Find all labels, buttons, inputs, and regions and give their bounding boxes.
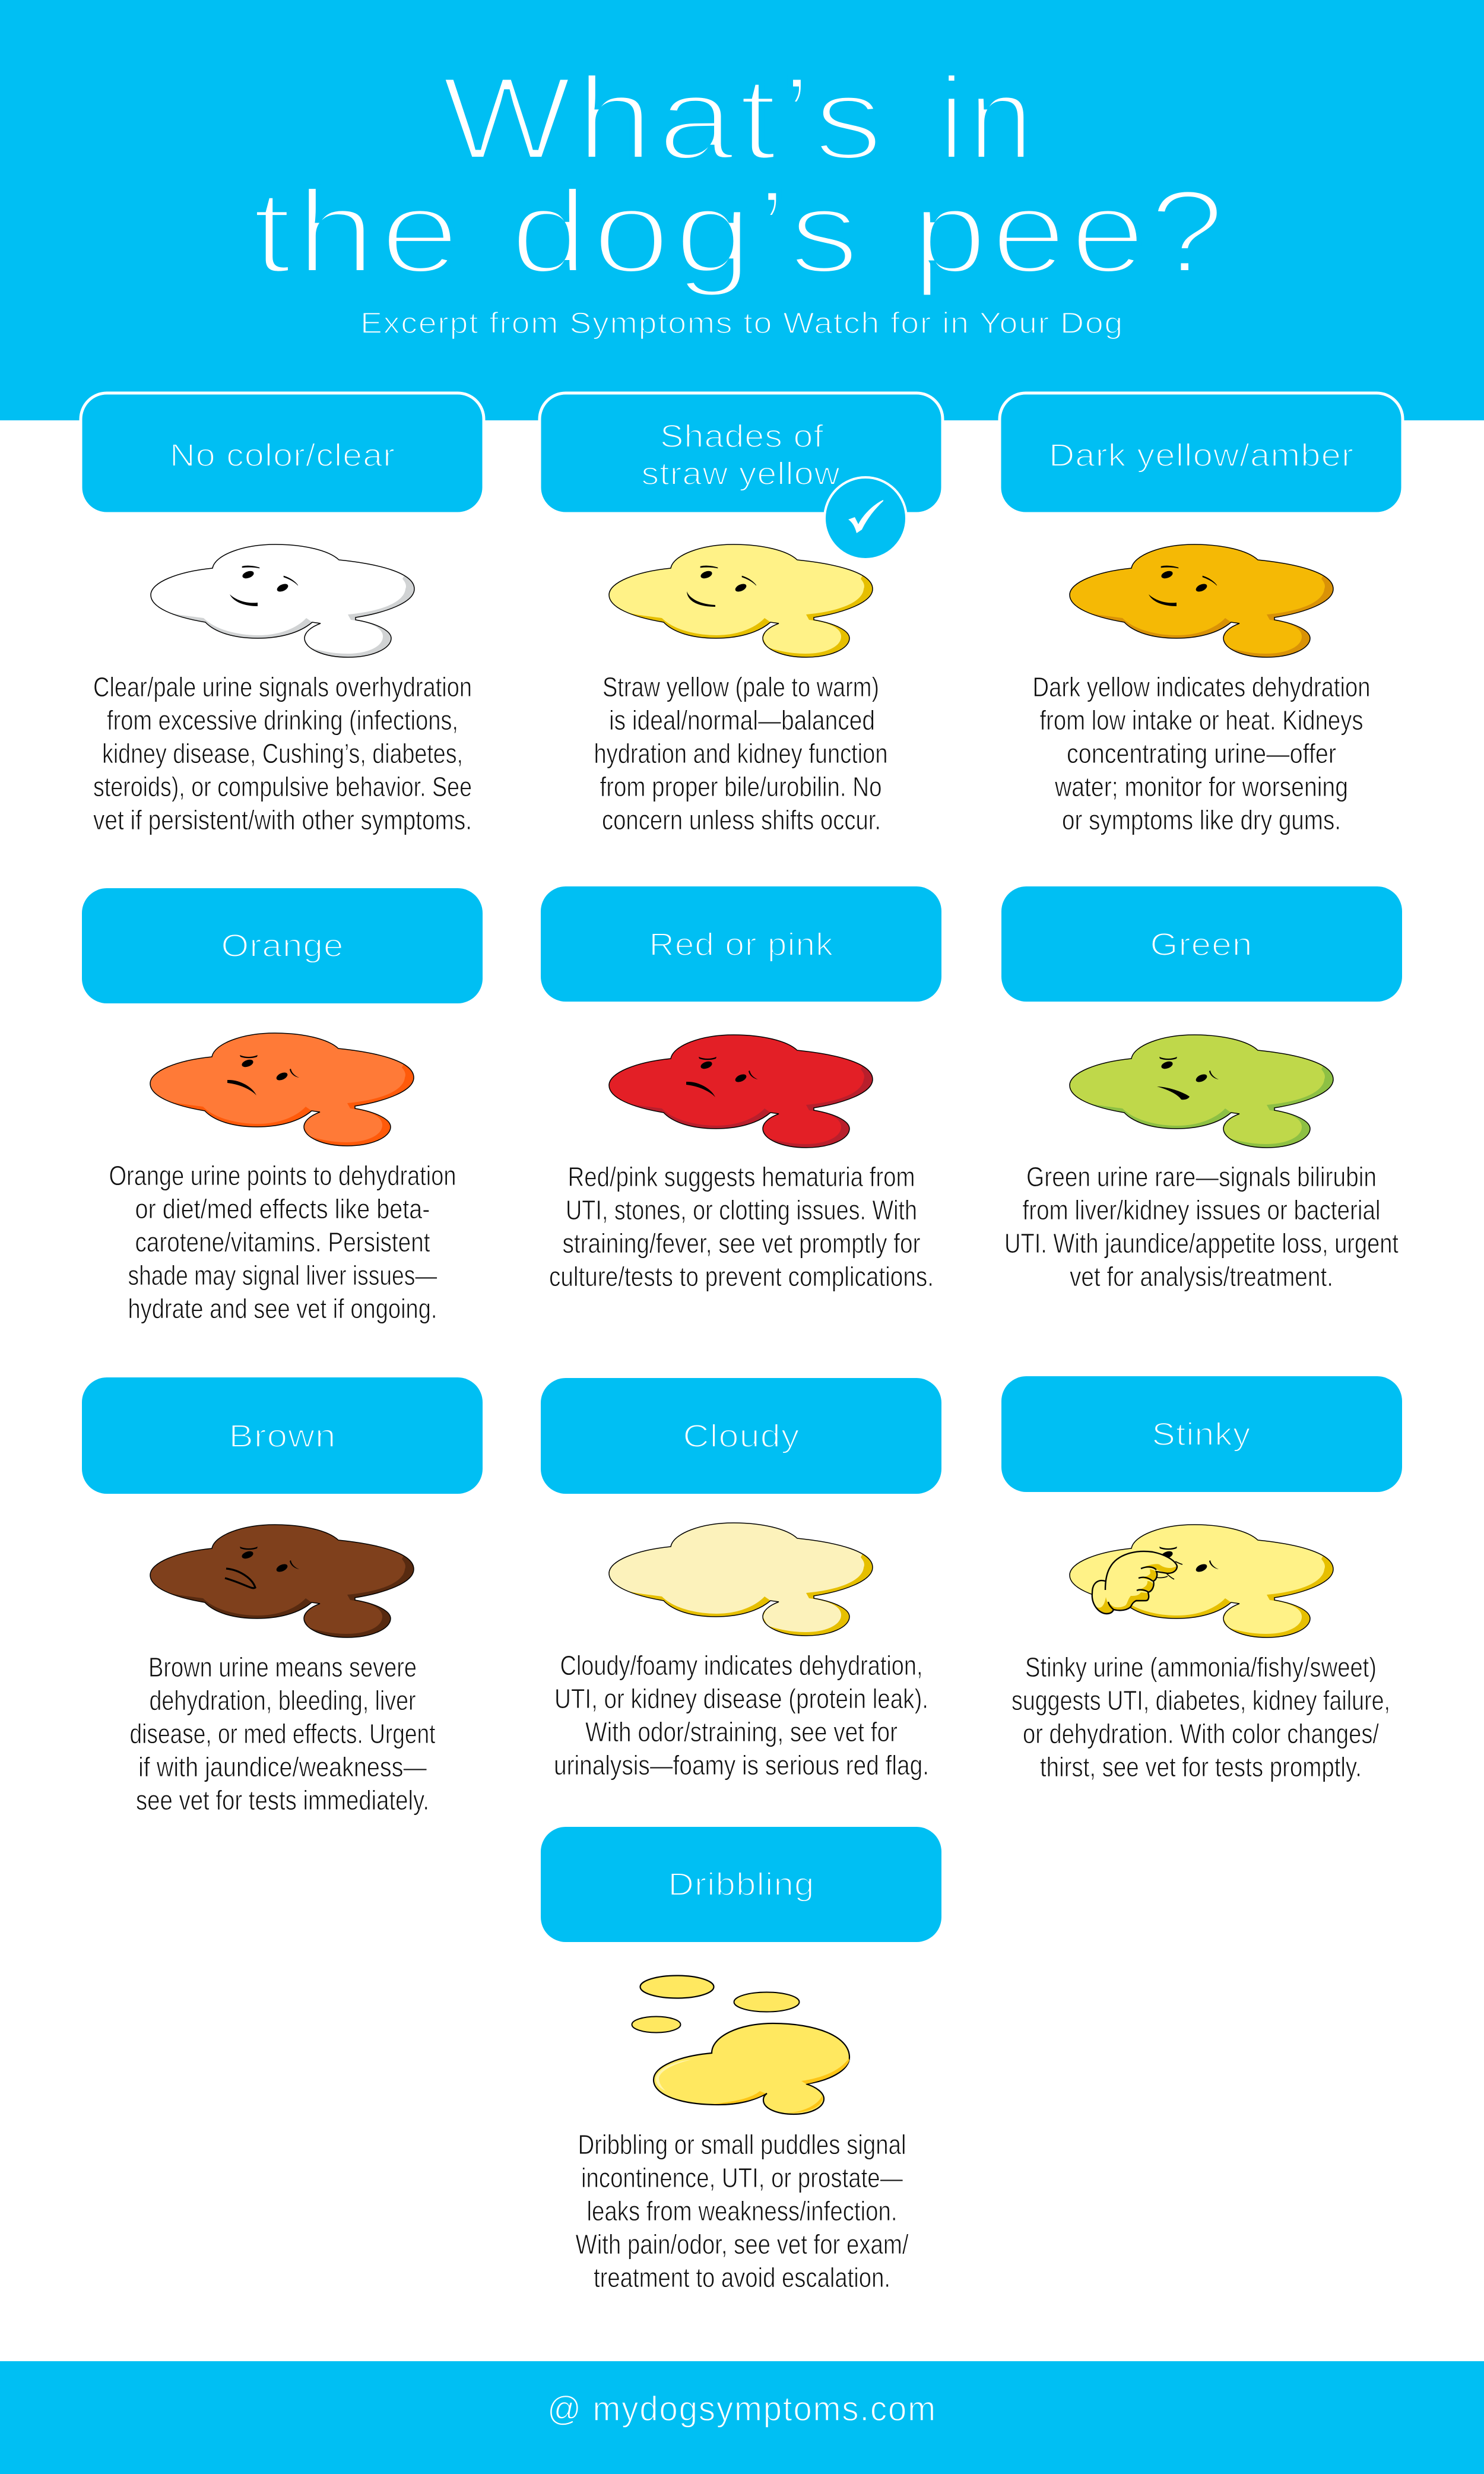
text: amber: water; monitor for worsening [1054,771,1348,802]
heading: cloudy [541,1378,941,1494]
text: stinky: thirst, see vet for tests promptly. [1040,1751,1362,1782]
text: straw yellow: concern unless shifts occur. [602,804,881,835]
heading: orange [82,888,483,1003]
text: dribbling: leaks from weakness/infection. [586,2196,898,2226]
title [252,52,1229,298]
heading: brown [82,1377,483,1494]
text: stinky: suggests UTI, diabetes, kidney failure, [1011,1685,1390,1716]
title: the [252,166,464,298]
subtitle: Excerpt from Symptoms to Watch for in Your Dog [360,306,1124,340]
text: brown: dehydration, bleeding, liver [150,1685,416,1716]
text: dribbling: treatment to avoid escalation. [594,2262,890,2293]
text: brown: Brown urine means severe [148,1652,417,1683]
panel: cloudy [541,1378,941,1781]
text: no color/clear: vet if persistent/with other symptoms. [93,804,472,835]
panel: shades of straw yellow [540,393,943,835]
heading: no color/clear: No color/clear [170,438,395,473]
text: no color/clear [93,671,472,835]
text: amber: or symptoms like dry gums. [1062,804,1341,835]
text: brown [129,1652,436,1816]
icon: amber puddle [1064,538,1343,657]
text: straw yellow: from proper bile/urobilin. No [600,771,882,802]
heading: green [1001,886,1402,1002]
text: brown: if with jaundice/weakness— [138,1751,427,1782]
panel: dark yellow/amber [1000,393,1403,835]
text: red or pink [549,1161,934,1292]
text: no color/clear: steroids), or compulsive behavior. See [93,771,472,802]
text: red or pink: Red/pink suggests hematuria from [567,1161,915,1192]
text: brown: disease, or med effects. Urgent [129,1718,436,1749]
icon: dribble puddles [632,1976,849,2114]
text: dribbling: Dribbling or small puddles signal [578,2129,906,2160]
icon: stinky puddle with paw [1064,1519,1343,1637]
heading: no color/clear [81,393,484,514]
text: cloudy: urinalysis—foamy is serious red flag. [554,1750,929,1781]
text: straw yellow: Straw yellow (pale to warm) [603,671,879,702]
text: no color/clear: kidney disease, Cushing’s, diabetes, [102,738,463,769]
text: green [1004,1161,1399,1292]
heading: dark yellow/amber: Dark yellow/amber [1049,438,1354,473]
text: orange: hydrate and see vet if ongoing. [128,1293,437,1324]
text: stinky [1011,1652,1390,1782]
text: orange [109,1160,456,1324]
footer url: @ mydogsymptoms.com [547,2390,937,2428]
text: cloudy: With odor/straining, see vet for [585,1716,898,1747]
text: orange: Orange urine points to dehydration [109,1160,456,1191]
heading: stinky [1001,1376,1402,1492]
icon: red puddle [603,1029,882,1148]
text: dribbling: With pain/odor, see vet for exam/ [576,2229,909,2260]
panel: stinky [1001,1376,1402,1782]
text: orange: or diet/med effects like beta- [135,1193,430,1224]
text: dribbling: incontinence, UTI, or prostate— [581,2162,903,2193]
text: amber: Dark yellow indicates dehydration [1033,671,1370,702]
text: straw yellow: is ideal/normal—balanced [609,705,875,736]
text: orange: shade may signal liver issues— [128,1260,437,1291]
text: straw yellow [594,671,888,835]
heading: stinky: Stinky [1152,1417,1251,1452]
text: red or pink: culture/tests to prevent complications. [549,1261,934,1292]
title: What’s [442,52,887,185]
heading: dribbling [541,1827,941,1942]
text: green: UTI. With jaundice/appetite loss, urgent [1004,1228,1399,1259]
text: cloudy: UTI, or kidney disease (protein leak). [554,1683,928,1714]
heading: red or pink [541,886,941,1002]
icon: straw yellow puddle [603,538,882,657]
text: cloudy: Cloudy/foamy indicates dehydration, [560,1650,922,1681]
text: orange: carotene/vitamins. Persistent [135,1227,430,1257]
icon: green puddle [1064,1029,1343,1148]
heading: green: Green [1150,927,1252,962]
title: pee? [912,166,1229,298]
text: straw yellow: hydration and kidney function [594,738,888,769]
heading: brown: Brown [229,1418,336,1454]
heading: dribbling: Dribbling [668,1867,814,1902]
footer band [0,2361,1484,2474]
text: red or pink: UTI, stones, or clotting issues. With [566,1195,917,1225]
text: green: from liver/kidney issues or bacterial [1022,1195,1381,1225]
panel: green [1001,886,1402,1292]
text: amber: from low intake or heat. Kidneys [1040,705,1363,736]
text: dribbling [576,2129,909,2293]
heading: shades of straw yellow [540,393,943,514]
text: brown: see vet for tests immediately. [136,1785,429,1816]
text: green: Green urine rare—signals bilirubin [1026,1161,1377,1192]
header band [0,0,1484,420]
text: stinky: Stinky urine (ammonia/fishy/sweet) [1025,1652,1377,1683]
text: red or pink: straining/fever, see vet promptly for [563,1228,920,1259]
panel: red or pink [541,886,941,1292]
text: no color/clear: Clear/pale urine signals overhydration [93,671,472,702]
panel: dribbling [541,1827,941,2293]
panel: orange [82,888,483,1324]
heading: dark yellow/amber [1000,393,1403,514]
heading: shades of straw yellow: Shades of [660,419,824,454]
heading: orange: Orange [221,928,344,964]
title: in [938,52,1037,185]
text: no color/clear: from excessive drinking (infections, [107,705,458,736]
text: stinky: or dehydration. With color changes/ [1023,1718,1379,1749]
icon: cloudy puddle [603,1517,882,1636]
icon: brown puddle [144,1519,423,1637]
text: green: vet for analysis/treatment. [1070,1261,1333,1292]
text: cloudy [554,1650,929,1781]
heading: cloudy: Cloudy [683,1418,800,1454]
title: dog’s [510,166,863,298]
heading: red or pink: Red or pink [649,927,833,962]
text: amber: concentrating urine—offer [1067,738,1336,769]
icon: check badge [825,477,906,559]
panel: no color/clear [81,393,484,835]
text: amber [1033,671,1370,835]
heading: shades of straw yellow: straw yellow [641,456,841,492]
icon: clear puddle [145,538,424,657]
icon: orange puddle [144,1027,423,1146]
panel: brown [82,1377,483,1816]
